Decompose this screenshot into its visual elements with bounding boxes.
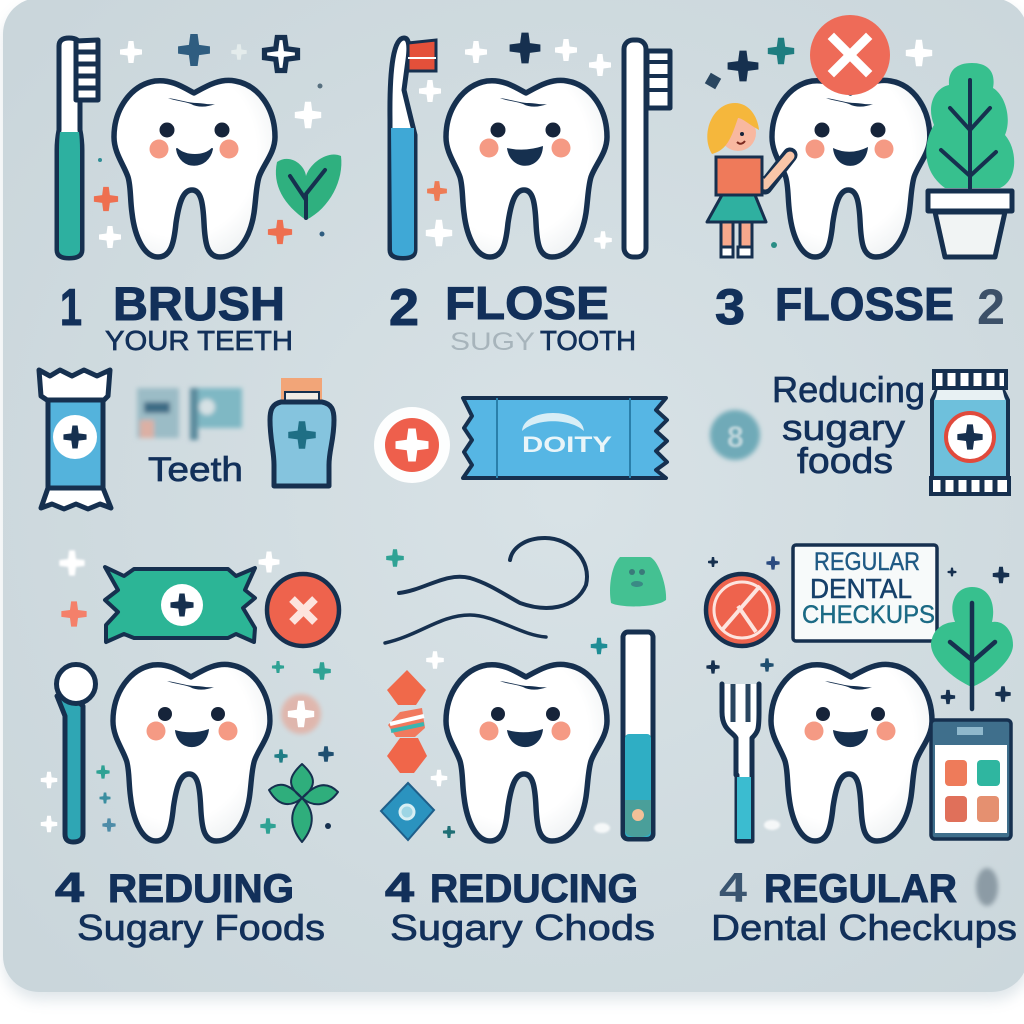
icon: sugar bag <box>931 371 1009 494</box>
panel: middle row left <box>39 370 334 509</box>
tooth with face <box>771 664 932 841</box>
icon: no-food badge <box>706 574 778 646</box>
subheading: dental checkups: Dental Checkups <box>711 907 1017 948</box>
sparkles <box>705 38 932 248</box>
blurred graphic <box>137 388 242 440</box>
icon: white toothbrush <box>624 40 670 257</box>
text: reducing: Reducing <box>772 369 925 410</box>
icon: red plus badge <box>374 407 450 483</box>
heading number: 4 muted: 4 <box>719 864 748 911</box>
icon: candy chain <box>387 670 427 773</box>
heading number: 3: 3 <box>715 279 745 335</box>
text: foods: foods <box>797 440 893 481</box>
icon: potted plant <box>926 63 1014 257</box>
icon: dental tube <box>623 632 653 839</box>
sparkles <box>419 33 612 249</box>
faded label: SUGY <box>450 328 535 356</box>
panel: step 4 reducing centre <box>381 538 666 948</box>
icon: green candy <box>105 567 255 642</box>
icon: fork <box>722 684 759 841</box>
blurred number badge: 8 <box>727 421 744 454</box>
heading number: 2 muted: 2 <box>977 279 1005 335</box>
tooth with face <box>114 80 275 257</box>
sparkles <box>94 34 325 248</box>
panel: step 1 brush <box>57 34 341 356</box>
icon: red x badge <box>810 15 890 95</box>
icon: candy wrapper <box>463 398 667 478</box>
icon: dental mirror <box>56 664 96 842</box>
icon: toothbrush <box>57 38 98 258</box>
subheading: tooth: TOOTH <box>540 325 636 356</box>
icon: child <box>707 103 790 257</box>
panel: step 4 regular checkups <box>706 545 1017 948</box>
subheading: sugary foods: Sugary Foods <box>77 907 325 948</box>
heading number: 4: 4 <box>55 864 85 911</box>
icon: leaf <box>276 154 341 220</box>
sign: regular dental checkups <box>793 545 937 641</box>
panel: middle row right <box>710 369 1009 494</box>
heading number: 2: 2 <box>389 279 419 337</box>
heading: flose: FLOSE <box>445 277 609 329</box>
text: sugary: sugary <box>782 407 905 448</box>
tooth with face <box>113 664 270 841</box>
tooth with face <box>446 664 607 841</box>
panel: middle row centre <box>374 398 667 483</box>
icon: floss strand <box>385 538 587 643</box>
heading: regular: REGULAR <box>764 867 957 911</box>
sparkles <box>386 549 610 838</box>
icon: blue toothbrush <box>390 38 436 258</box>
subheading: sugary chods: Sugary Chods <box>390 907 655 948</box>
heading: 1 brush: 1 <box>60 279 82 337</box>
heading: reduing: REDUING <box>108 867 294 911</box>
sign: regular dental checkups: CHECKUPS <box>802 601 935 629</box>
icon: blue gem <box>381 783 434 840</box>
wrapper label: DOITY <box>522 432 612 457</box>
sparkles <box>706 556 1011 830</box>
blurred glyph <box>976 868 998 906</box>
tooth with face <box>446 80 607 257</box>
icon: mouthwash bottle <box>270 378 334 486</box>
panel: step 3 floss <box>705 15 1014 335</box>
heading: flosse: FLOSSE <box>775 278 954 330</box>
tooth with face <box>772 80 930 257</box>
icon: snack bar <box>39 370 111 509</box>
panel: step 2 floss <box>389 33 670 356</box>
icon: red x circle <box>267 574 339 646</box>
panel: step 4 reducing left <box>41 550 339 948</box>
icon: green clover <box>269 764 338 842</box>
icon: green blob <box>610 557 666 606</box>
heading: reducing: REDUCING <box>430 867 638 911</box>
sign: regular dental checkups: DENTAL <box>810 573 912 604</box>
sparkles <box>41 550 334 834</box>
icon: tablet <box>931 720 1011 839</box>
sign: regular dental checkups: REGULAR <box>814 548 920 576</box>
heading number: 4: 4 <box>385 864 415 911</box>
label: teeth: Teeth <box>148 451 243 489</box>
icon: tree <box>931 587 1013 709</box>
heading: brush: BRUSH <box>113 277 285 330</box>
blurred number badge <box>710 410 760 460</box>
subheading: your teeth: YOUR TEETH <box>105 325 293 356</box>
